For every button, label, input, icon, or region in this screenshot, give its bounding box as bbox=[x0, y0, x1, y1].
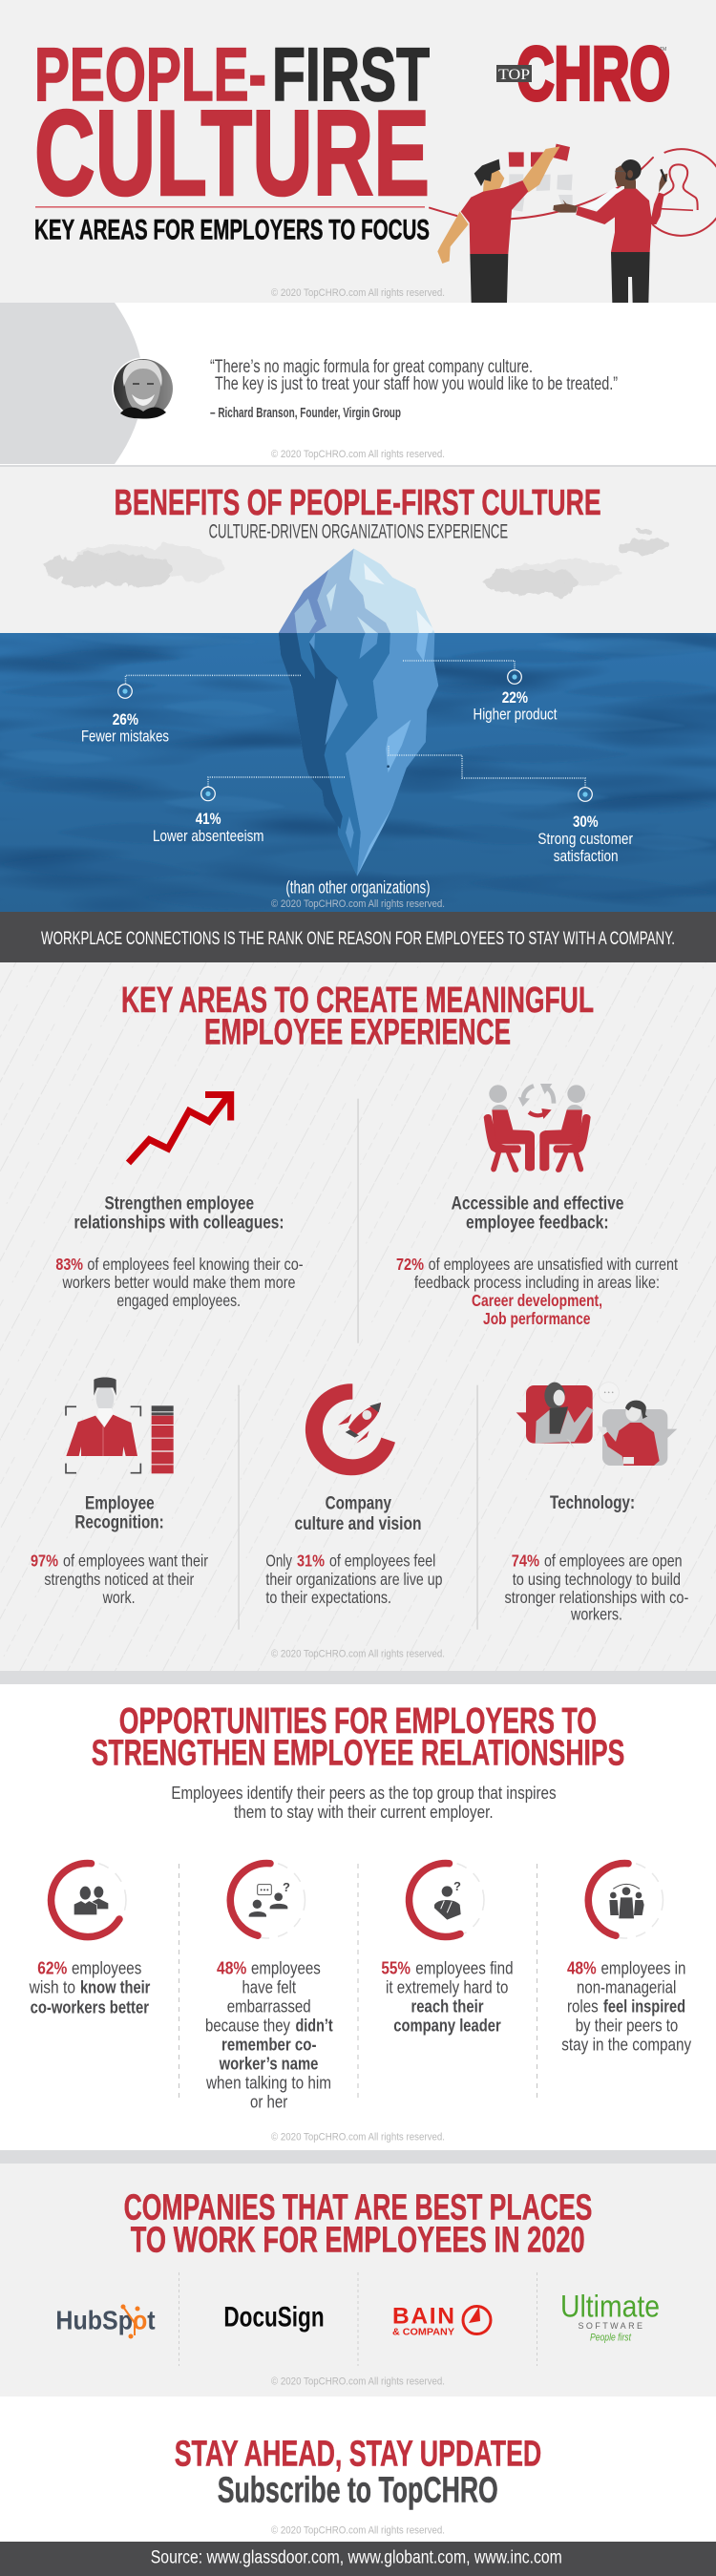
callout: 30% strong customer satisfaction bbox=[387, 746, 633, 865]
block: technology: Technology: bbox=[550, 1492, 635, 1513]
stat: 48% embarrassed: remember co- bbox=[221, 2035, 317, 2054]
stat: 48% embarrassed: employees bbox=[251, 1958, 321, 1977]
donut: 62% bbox=[50, 1862, 126, 1938]
block: strengthen relationships: Strengthen employee bbox=[105, 1193, 254, 1214]
title: people-first culture: PEOPLE- bbox=[34, 32, 266, 116]
illustration: two colleagues arranging notes bbox=[430, 144, 716, 303]
clouds bbox=[42, 529, 670, 596]
stat: 55%: employees find bbox=[415, 1958, 514, 1977]
logo: Bain and Company: BAIN bbox=[392, 2304, 454, 2330]
stat: 48% embarrassed: didn’t bbox=[296, 2016, 333, 2035]
logo: Ultimate Software bbox=[560, 2290, 660, 2344]
block: employee recognition: strengths noticed at their bbox=[44, 1570, 194, 1589]
stat: 55%: it extremely hard to bbox=[386, 1977, 508, 1996]
block: strengthen relationships bbox=[55, 1193, 304, 1310]
heading bbox=[121, 981, 594, 1052]
callout: 22% higher product bbox=[403, 661, 558, 724]
stat: 62%: employees bbox=[72, 1958, 141, 1977]
block: employee recognition: of employees want their bbox=[63, 1552, 208, 1571]
stat: 62%: wish to bbox=[29, 1977, 75, 1996]
donut: 48% bbox=[586, 1862, 663, 1938]
block: employee feedback: Career development, bbox=[472, 1291, 602, 1310]
logo: TopCHRO: TOP bbox=[498, 67, 530, 83]
stat: 48% inspired: stay in the company bbox=[561, 2035, 691, 2054]
water bbox=[0, 633, 716, 912]
icon: chat between colleagues bbox=[516, 1383, 677, 1466]
panel: best places to work bbox=[0, 2164, 716, 2397]
copyright note: © 2020 TopCHRO.com All rights reserved. bbox=[271, 2376, 445, 2388]
stat: 62%: co-workers better bbox=[31, 1997, 149, 2016]
block: company culture: culture and vision bbox=[294, 1513, 422, 1534]
block: technology: to using technology to build bbox=[513, 1570, 681, 1589]
block: company culture: Company bbox=[326, 1493, 391, 1514]
block: technology: 74% bbox=[512, 1552, 539, 1571]
block: company culture: of employees feel bbox=[329, 1552, 435, 1571]
block: employee recognition: Employee bbox=[85, 1493, 155, 1514]
block: employee feedback bbox=[396, 1193, 678, 1328]
banner: workplace connections bbox=[0, 912, 716, 962]
callout: 41% lower absenteeism: 41% bbox=[196, 810, 221, 828]
logo: HubSpot: HubSpot bbox=[55, 2305, 156, 2334]
stat: 48% embarrassed bbox=[205, 1862, 333, 2111]
block: strengthen relationships: 83% bbox=[55, 1255, 83, 1274]
logo: Ultimate Software: SOFTWARE bbox=[579, 2321, 642, 2331]
logo: TopCHRO: TM bbox=[660, 47, 666, 53]
heading bbox=[92, 1701, 624, 1773]
donut: 48% bbox=[229, 1862, 305, 1938]
logo: Ultimate Software: Ultimate bbox=[560, 2290, 660, 2324]
donut: 55% bbox=[408, 1862, 484, 1938]
copyright note: © 2020 TopCHRO.com All rights reserved. bbox=[271, 898, 445, 910]
callout: 30% strong customer satisfaction: satisfaction bbox=[554, 847, 619, 865]
icon: rising arrow bbox=[128, 1093, 231, 1163]
stat: 48% embarrassed: 48% bbox=[217, 1958, 246, 1977]
logo: Bain and Company bbox=[392, 2304, 491, 2337]
block: employee feedback: employee feedback: bbox=[466, 1213, 609, 1234]
stat: 55%: reach their bbox=[411, 1996, 483, 2016]
block: company culture: their organizations are live up bbox=[265, 1570, 443, 1589]
stat: 48% embarrassed: because they bbox=[205, 2016, 290, 2035]
block: company culture bbox=[265, 1493, 443, 1607]
block: employee recognition: work. bbox=[102, 1588, 136, 1607]
block: company culture: Only bbox=[265, 1552, 292, 1571]
stat: 55%: company leader bbox=[393, 2016, 501, 2035]
block: strengthen relationships: of employees feel knowing their co- bbox=[87, 1255, 304, 1274]
block: technology: of employees are open bbox=[544, 1552, 683, 1571]
block: technology: workers. bbox=[570, 1605, 622, 1624]
intro text: Employees identify their peers as the top group that inspires bbox=[171, 1783, 557, 1803]
panel: quote bbox=[0, 303, 716, 467]
callout: 41% lower absenteeism bbox=[153, 777, 345, 845]
footer: sources bbox=[0, 2542, 716, 2576]
portrait: Richard Branson bbox=[113, 357, 174, 420]
block: technology bbox=[504, 1492, 688, 1624]
block: employee recognition: Recognition: bbox=[74, 1512, 164, 1533]
block: employee feedback: Job performance bbox=[483, 1309, 591, 1328]
panel: subscribe bbox=[0, 2397, 716, 2542]
stat: 48% embarrassed: have felt bbox=[242, 1977, 296, 1996]
logo: Ultimate Software: People first bbox=[590, 2333, 632, 2344]
stat: 48% embarrassed: worker’s name bbox=[219, 2054, 318, 2073]
callout: 26% fewer mistakes bbox=[81, 675, 301, 746]
stat: 48% embarrassed: embarrassed bbox=[227, 1996, 311, 2016]
block: employee feedback: Accessible and effective bbox=[452, 1193, 624, 1214]
stat: 48% inspired: employees in bbox=[601, 1958, 685, 1977]
stat: 48% embarrassed: or her bbox=[250, 2092, 287, 2111]
callout: 22% higher product: 22% bbox=[502, 688, 528, 707]
panel: benefits iceberg bbox=[0, 467, 716, 912]
stat: 48% inspired bbox=[561, 1862, 691, 2054]
call to action: Subscribe to TopCHRO bbox=[218, 2471, 498, 2511]
icon: rocket in ring bbox=[305, 1383, 395, 1475]
quotation bbox=[210, 357, 618, 394]
intro text: them to stay with their current employer. bbox=[234, 1802, 494, 1822]
subtitle: KEY AREAS FOR EMPLOYERS TO FOCUS bbox=[34, 215, 430, 246]
copyright note: © 2020 TopCHRO.com All rights reserved. bbox=[271, 449, 445, 460]
footer: sources: Source: www.glassdoor.com, www.globant.com, www.inc.com bbox=[151, 2548, 562, 2568]
callout: 30% strong customer satisfaction: Strong customer bbox=[537, 830, 633, 848]
quotation: “There’s no magic formula for great company culture. bbox=[210, 357, 533, 377]
stat: 62%: know their bbox=[80, 1977, 150, 1996]
title: people-first culture: CULTURE bbox=[34, 85, 430, 221]
attribution: – Richard Branson, Founder, Virgin Group bbox=[210, 406, 401, 421]
stat: 48% embarrassed: when talking to him bbox=[205, 2073, 331, 2092]
block: employee recognition: 97% bbox=[31, 1552, 58, 1571]
donut: 55%: ? bbox=[453, 1879, 461, 1893]
copyright note: © 2020 TopCHRO.com All rights reserved. bbox=[271, 2132, 445, 2143]
callout: 41% lower absenteeism: Lower absenteeism bbox=[153, 827, 263, 845]
heading: EMPLOYEE EXPERIENCE bbox=[204, 1012, 511, 1052]
block: company culture: to their expectations. bbox=[265, 1588, 391, 1607]
callout: 26% fewer mistakes: 26% bbox=[113, 710, 138, 728]
stat: 55% bbox=[381, 1862, 514, 2035]
block: strengthen relationships: relationships with colleagues: bbox=[74, 1213, 284, 1234]
block: employee recognition bbox=[31, 1493, 208, 1607]
stat: 48% inspired: by their peers to bbox=[576, 2016, 678, 2035]
iceberg bbox=[279, 548, 438, 876]
logo: Bain and Company: & COMPANY bbox=[392, 2327, 454, 2337]
stat: 62%: 62% bbox=[37, 1958, 67, 1977]
stat: 55%: 55% bbox=[381, 1958, 411, 1977]
donut: 48%: ? bbox=[283, 1880, 290, 1894]
subheading: CULTURE-DRIVEN ORGANIZATIONS EXPERIENCE bbox=[209, 520, 508, 542]
stat: 48% inspired: 48% bbox=[567, 1958, 597, 1977]
logo: DocuSign: DocuSign bbox=[223, 2302, 325, 2333]
intro text bbox=[171, 1783, 557, 1822]
stat: 62% bbox=[29, 1862, 150, 2016]
heading bbox=[124, 2187, 592, 2261]
copyright note: © 2020 TopCHRO.com All rights reserved. bbox=[271, 1649, 445, 1660]
callout: 26% fewer mistakes: Fewer mistakes bbox=[81, 728, 169, 746]
title: people-first culture: FIRST bbox=[272, 32, 430, 116]
copyright note: © 2020 TopCHRO.com All rights reserved. bbox=[271, 287, 445, 299]
stat: 48% inspired: non-managerial bbox=[577, 1977, 676, 1996]
stat: 48% inspired: roles bbox=[567, 1996, 599, 2016]
block: employee feedback: 72% bbox=[396, 1255, 424, 1274]
stat: 48% inspired: feel inspired bbox=[603, 1996, 685, 2016]
panel: header bbox=[0, 0, 716, 303]
title: people-first culture bbox=[34, 32, 430, 221]
copyright note: © 2020 TopCHRO.com All rights reserved. bbox=[271, 2524, 445, 2536]
block: strengthen relationships: engaged employees. bbox=[116, 1291, 241, 1310]
block: employee feedback: feedback process including in areas like: bbox=[414, 1273, 660, 1292]
icon: employee recognition profile bbox=[66, 1377, 174, 1473]
callout: 22% higher product: Higher product bbox=[474, 706, 558, 724]
note: than other organizations: (than other organizations) bbox=[285, 878, 431, 897]
block: company culture: 31% bbox=[297, 1552, 325, 1571]
panel: key areas bbox=[0, 962, 716, 1671]
icon: two people in conversation bbox=[484, 1084, 591, 1172]
heading: STAY AHEAD, STAY UPDATED bbox=[175, 2434, 541, 2474]
block: strengthen relationships: workers better would make them more bbox=[62, 1273, 296, 1292]
callout: 30% strong customer satisfaction: 30% bbox=[573, 813, 599, 831]
panel: opportunities bbox=[0, 1684, 716, 2150]
